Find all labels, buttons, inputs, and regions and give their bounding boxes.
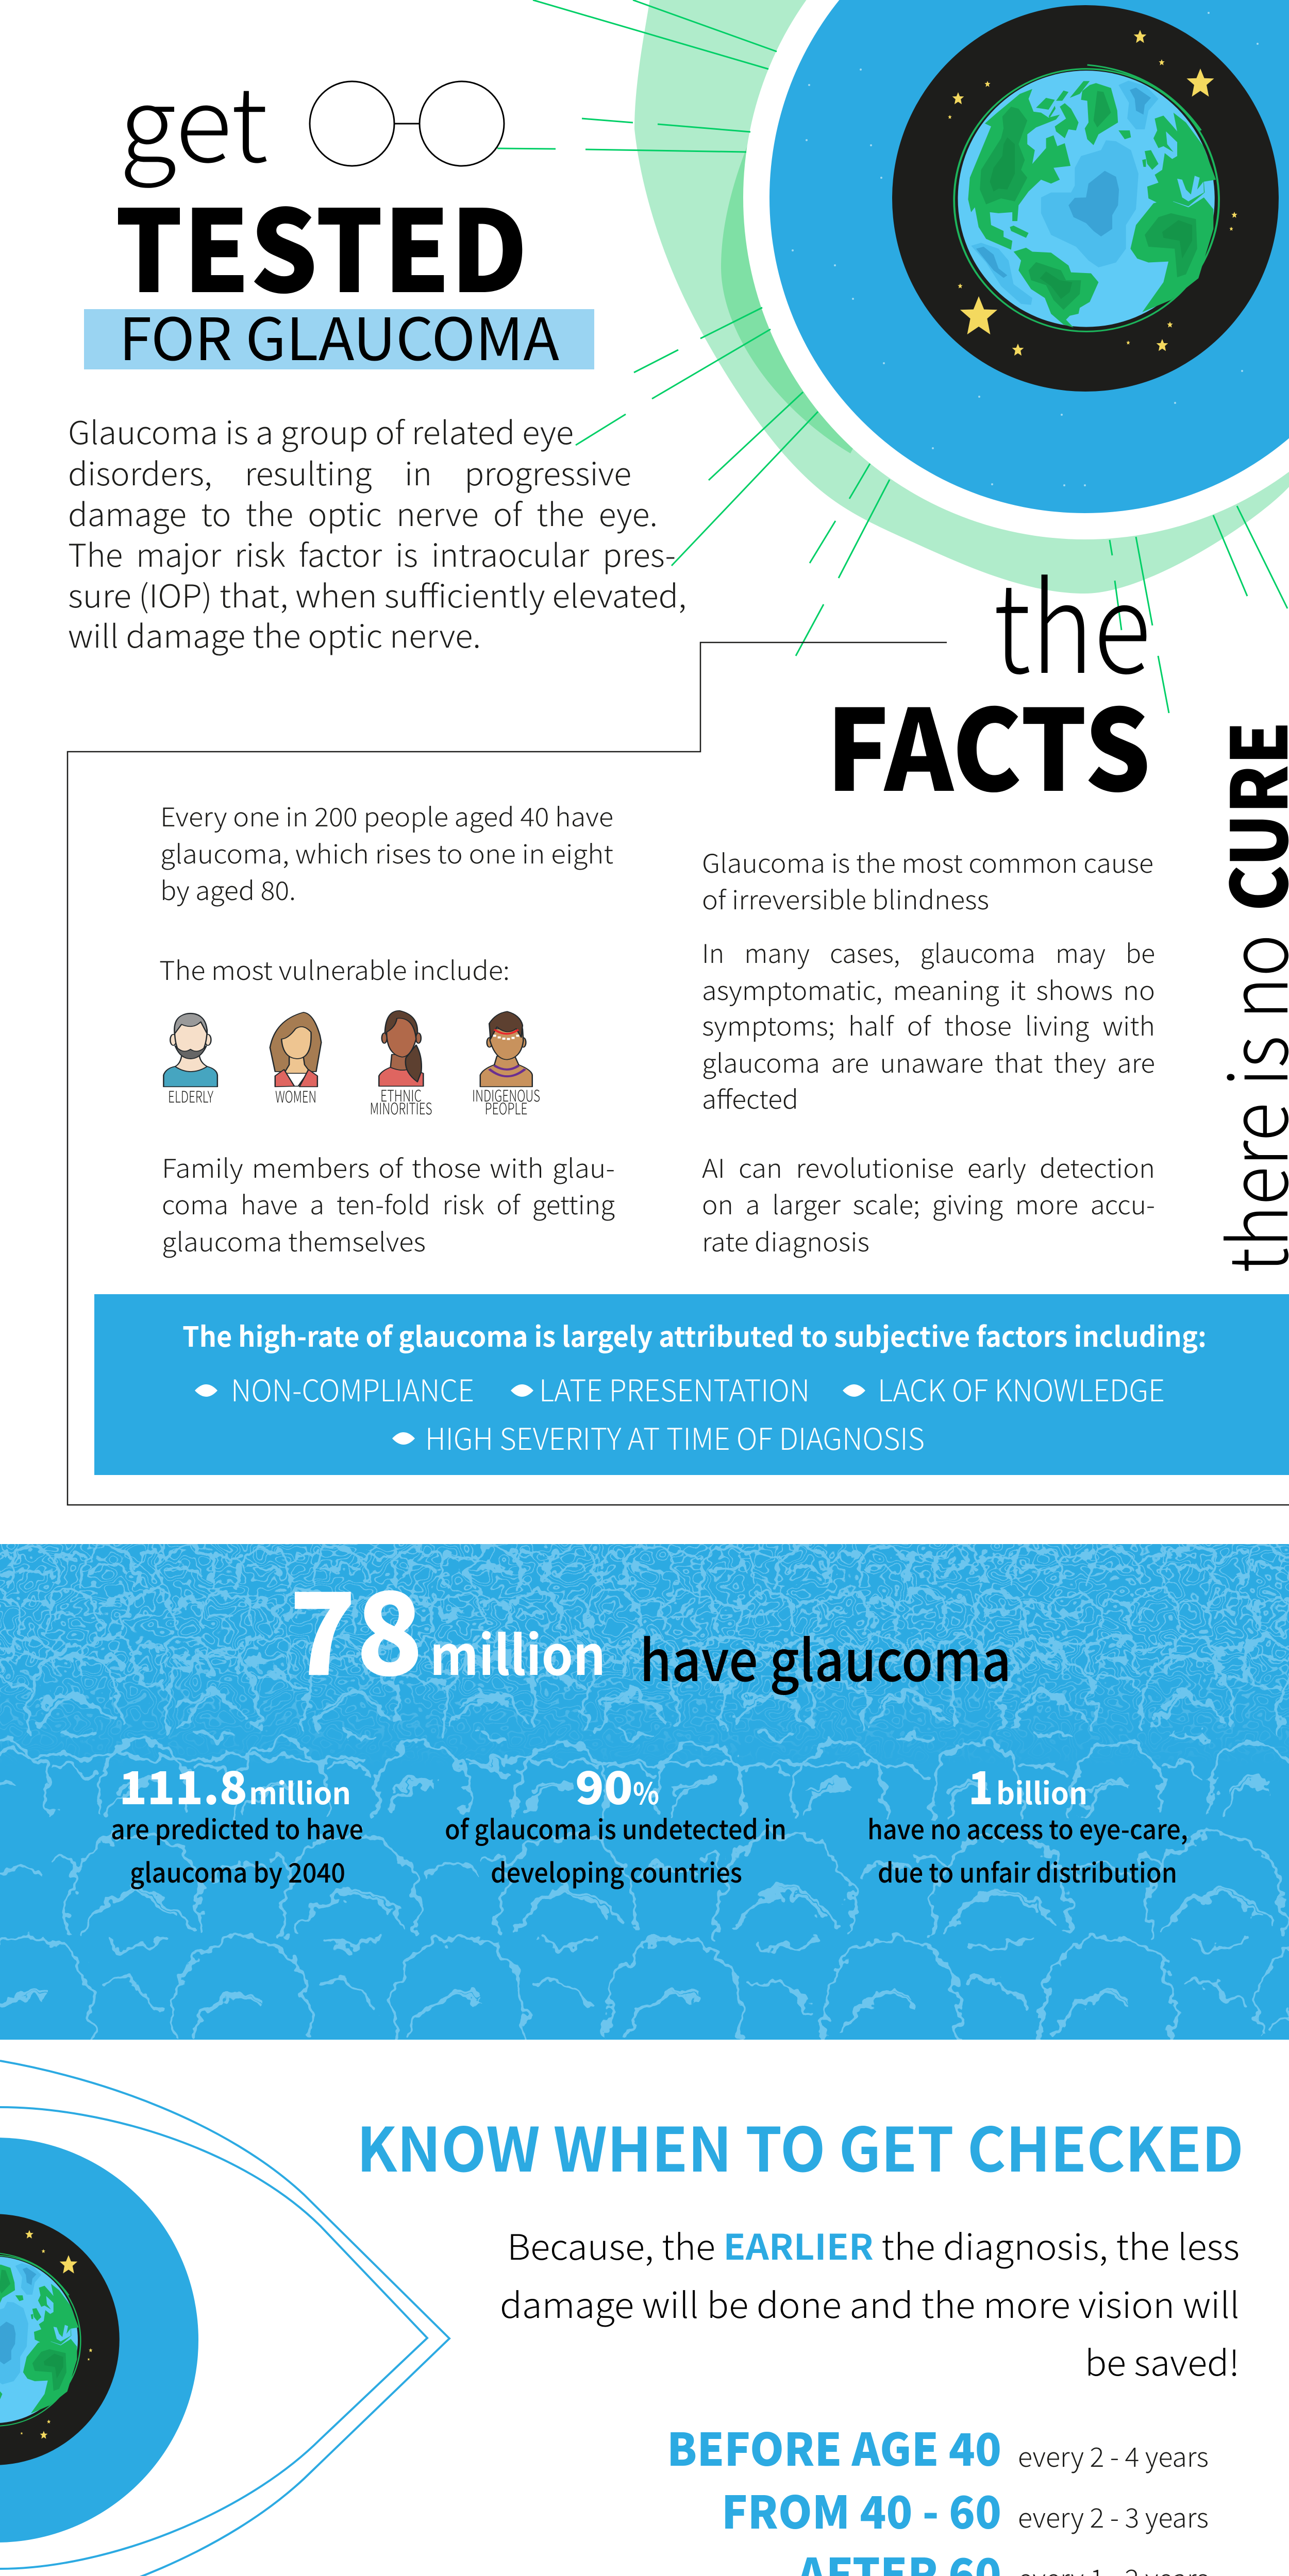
fact: asymptomatic: affected [702,1079,798,1116]
stat: undetected: % [633,1770,659,1813]
globe [0,2214,120,2465]
schedule: from 40 to 60: every 2 - 3 years [1018,2497,1209,2535]
schedule: from 40 to 60 [722,2477,1209,2542]
right facts column [702,843,1155,1259]
green outer halo [634,0,1289,594]
factor: non-compliance: NON-COMPLIANCE [231,1367,474,1410]
fact: prevalence by age: by aged 80. [160,871,296,908]
globe with stars [892,5,1279,392]
intro paragraph: sure (IOP) that, when sufficiently elevated, [68,571,687,617]
title: get tested for glaucoma [84,42,594,377]
explanation text: Because, the EARLIER the diagnosis, the less [507,2219,1240,2270]
stat: predicted 2040: 111.8 [119,1752,247,1818]
fact: AI detection: rate diagnosis [702,1222,869,1259]
earth [954,65,1219,331]
intro paragraph: will damage the optic nerve. [68,611,481,657]
hero eye graphic [634,0,1289,594]
green light rays [497,0,1287,713]
factor: lack of knowledge: LACK OF KNOWLEDGE [878,1367,1165,1410]
white ring [743,0,1289,539]
fact: family risk: Family members of those with glau- [162,1148,615,1185]
fact: prevalence by age: Every one in 200 people aged 40 have [160,797,613,834]
explanation text: be saved! [1085,2335,1240,2386]
section: know when to get checked [357,2101,1244,2576]
fact: asymptomatic: In many cases, glaucoma may be [702,934,1155,971]
stat: predicted 2040 [111,1752,363,1890]
intro paragraph: The major risk factor is intraocular pres- [68,530,676,576]
darker green crescent [721,103,928,453]
facts frame [68,642,1289,1505]
text: most vulnerable: The most vulnerable include: [159,951,510,988]
vulnerable group labels: WOMEN [275,1084,316,1107]
word: tested: TESTED [115,161,528,325]
fact: AI detection: AI can revolutionise early detection [702,1148,1155,1185]
fact: asymptomatic: glaucoma are unaware that they are [702,1043,1155,1080]
heading: the facts: FACTS [826,660,1151,823]
blue iris [769,0,1289,513]
fact: family risk [162,1148,615,1259]
intro paragraph: damage to the optic nerve of the eye. [68,489,658,535]
vulnerable group labels: ELDERLY [168,1084,213,1107]
fact: leading cause: of irreversible blindness [702,880,989,917]
fact: prevalence by age: glaucoma, which rises to one in eight [160,834,613,871]
vulnerable group labels [168,1083,540,1119]
subtitle text: FOR GLAUCOMA [119,293,559,377]
explanation text: damage will be done and the more vision will [500,2277,1240,2328]
stat: no access: due to unfair distribution [878,1852,1177,1890]
intro paragraph: Glaucoma is a group of related eye [68,408,574,453]
fact: family risk: glaucoma themselves [162,1222,426,1259]
icon: elderly [163,1013,217,1087]
panel: statistics crowd [0,1520,1289,2061]
factor: late presentation: LATE PRESENTATION [539,1367,810,1410]
stat: undetected: 90 [575,1752,633,1818]
eye inner outline [0,2107,427,2569]
fact: leading cause: Glaucoma is the most common cause [702,843,1153,880]
black pupil [892,5,1279,392]
schedule: before age 40: BEFORE AGE 40 [667,2414,1001,2479]
factor: high severity: HIGH SEVERITY AT TIME OF DIAGNOSIS [425,1415,925,1459]
panel: subjective factors [94,1294,1289,1475]
factors heading: The high-rate of glaucoma is largely attributed to subjective factors including: [182,1314,1207,1355]
stars [948,30,1237,355]
vulnerable group labels: MINORITIES [370,1096,432,1119]
headline stat: 78 [289,1542,423,1708]
icon: women [270,1012,321,1087]
iris specks [792,12,1259,486]
icon: glasses [310,81,504,166]
schedule: before age 40: every 2 - 4 years [1018,2436,1209,2475]
eye illustration [0,2061,449,2576]
schedule: after 60 [797,2539,1209,2576]
fact: asymptomatic: symptoms; half of those living with [702,1006,1155,1043]
headline stat [289,1542,1011,1708]
stat: undetected: of glaucoma is undetected in [445,1808,786,1847]
crowd outline texture [0,1520,1289,2061]
stat: no access [867,1752,1188,1890]
subtitle band [84,309,594,369]
icon: ethnic minorities [379,1011,423,1086]
fact: asymptomatic: asymptomatic, meaning it shows no [702,971,1155,1008]
stat: predicted 2040: are predicted to have [111,1808,363,1847]
intro paragraph: disorders, resulting in progressive [68,449,631,495]
vertical text: there is no cure [1194,721,1289,1273]
heading: the facts [826,530,1151,823]
stat: predicted 2040: glaucoma by 2040 [130,1852,345,1890]
icon: indigenous people [480,1011,532,1087]
fact: AI detection: on a larger scale; giving more accu- [702,1185,1155,1222]
stat: no access: billion [996,1770,1087,1813]
fact: family risk: coma have a ten-fold risk of getting [162,1185,615,1222]
stat: undetected: developing countries [491,1852,742,1890]
stat: no access: have no access to eye-care, [867,1808,1188,1847]
word: get: get [119,42,268,192]
heading: KNOW WHEN TO GET CHECKED [357,2101,1244,2189]
vulnerable group labels: ETHNIC [380,1083,422,1106]
vulnerable group labels: PEOPLE [484,1096,528,1119]
eye outer outline [0,2061,449,2576]
left facts column [159,797,615,1259]
fact: AI detection [702,1148,1155,1259]
headline stat: million [430,1613,606,1691]
stat: predicted 2040: million [249,1770,351,1813]
explanation text [500,2219,1240,2386]
intro paragraph [68,408,687,657]
headline stat: have glaucoma [640,1615,1011,1698]
vulnerable group labels: INDIGENOUS [472,1083,540,1106]
schedule: before age 40 [667,2414,1209,2479]
fact: asymptomatic [702,934,1155,1116]
stat: undetected [445,1752,786,1890]
heading: the facts: the [993,530,1151,709]
iris [0,2138,198,2543]
fact: leading cause [702,843,1153,917]
vulnerable people icons [163,1011,532,1087]
stat: no access: 1 [968,1752,993,1818]
schedule: from 40 to 60: FROM 40 - 60 [722,2477,1001,2542]
fact: prevalence by age [160,797,613,908]
